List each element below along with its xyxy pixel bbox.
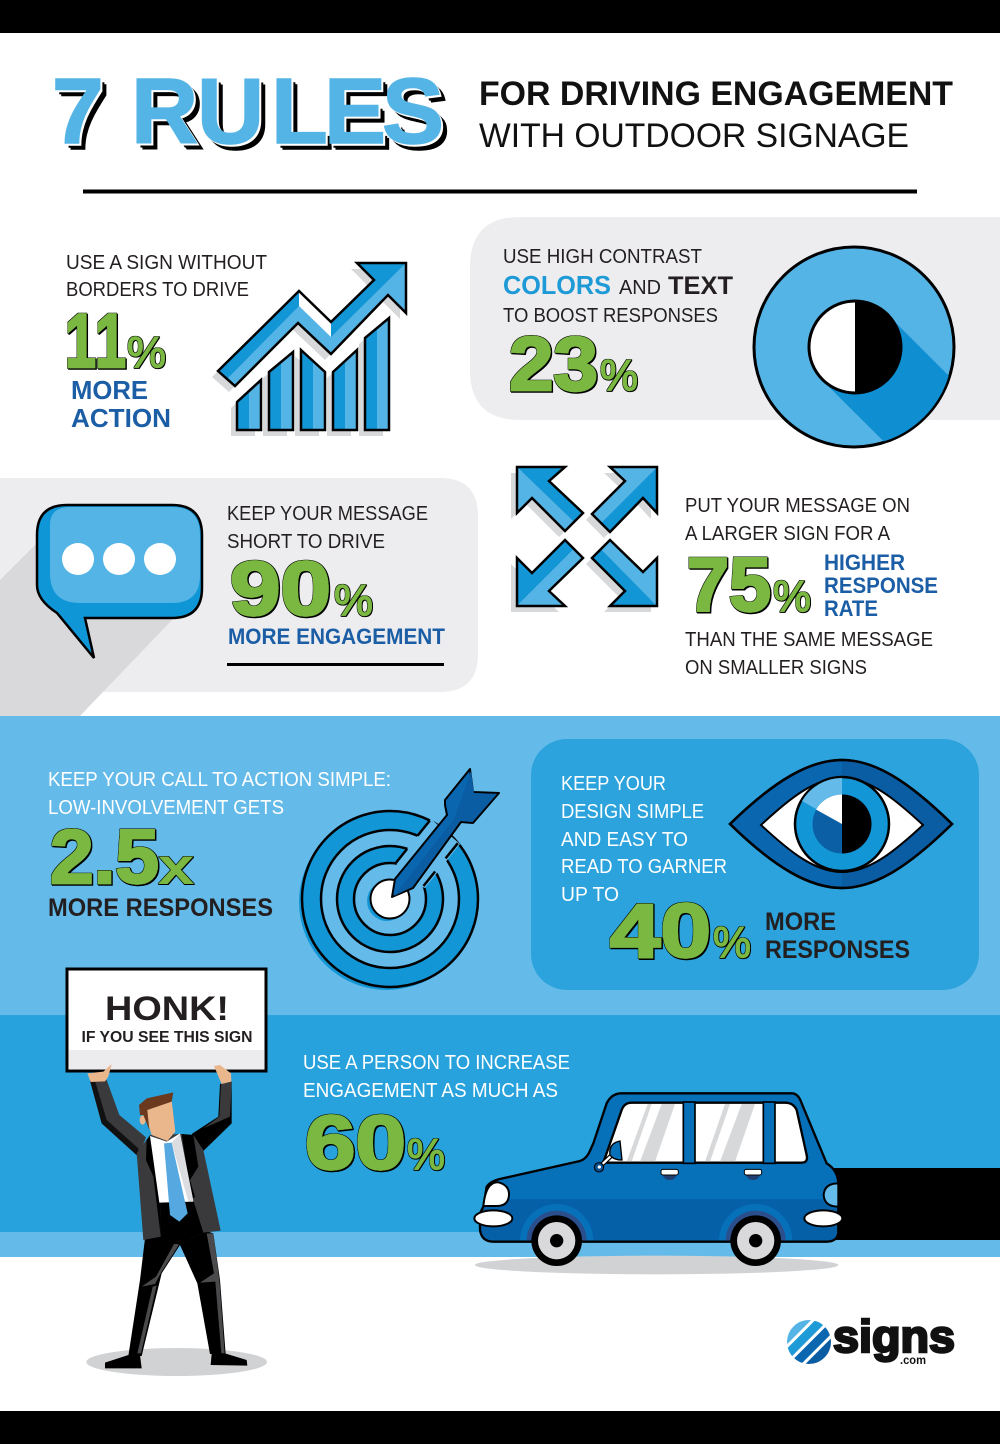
subtitle: WITH OUTDOOR SIGNAGE — [479, 117, 909, 155]
rule 6 text: AND EASY TO — [561, 829, 688, 851]
higher response rate: RESPONSE — [824, 573, 938, 598]
stat 2.5x: x — [160, 841, 192, 894]
icon: contrast circle — [752, 246, 956, 448]
black road block — [833, 1168, 1000, 1240]
stat 60% — [305, 1101, 445, 1186]
rule 1 text: USE A SIGN WITHOUT — [66, 252, 267, 274]
stat 23%: % — [600, 351, 638, 400]
stat 11%: 1 — [65, 299, 96, 384]
more responses: RESPONSES — [765, 936, 910, 964]
stat 75%: % — [773, 572, 811, 621]
subtitle: FOR DRIVING ENGAGEMENT — [479, 75, 953, 113]
rule 7: person text: ENGAGEMENT AS MUCH AS — [303, 1080, 558, 1102]
person holding sign — [86, 1064, 267, 1376]
stat 2.5x: 2.5 — [50, 815, 159, 900]
subtitle — [479, 75, 953, 155]
rule 2 text: TO BOOST RESPONSES — [503, 305, 718, 327]
bumpers — [474, 1210, 842, 1226]
title: 7 rules: 7 RULES — [0, 59, 444, 163]
mid blue band — [0, 1015, 1000, 1232]
rule 6 text: KEEP YOUR — [561, 773, 666, 795]
higher response rate: HIGHER — [824, 550, 905, 575]
rule 4: larger sign — [511, 467, 938, 679]
icon: eye — [730, 760, 952, 888]
icon: four expanding arrows — [511, 467, 657, 612]
stat 40%: % — [713, 918, 751, 967]
shoes — [105, 1353, 247, 1368]
rule 4 text — [685, 495, 933, 679]
more engagement: MORE ENGAGEMENT — [228, 624, 446, 649]
more action: ACTION — [71, 403, 171, 433]
higher response rate: RATE — [824, 596, 878, 621]
rule 3 text: SHORT TO DRIVE — [227, 531, 385, 553]
long shadow — [0, 543, 172, 716]
rule 6 text: DESIGN SIMPLE — [561, 801, 704, 823]
stat 40% — [610, 889, 751, 974]
rule 6 text: UP TO — [561, 884, 619, 906]
signs.com logo: .com — [900, 1353, 926, 1367]
sign text: HONK! — [105, 990, 229, 1028]
more responses — [765, 908, 910, 964]
icon: speech bubble — [37, 505, 202, 658]
bottom black bar — [0, 1411, 1000, 1444]
icon: target with dart — [299, 769, 499, 990]
rule 2 text: AND — [619, 277, 661, 299]
rule 4 text: THAN THE SAME MESSAGE — [685, 629, 933, 651]
more action: MORE — [71, 375, 148, 405]
honk sign — [67, 969, 266, 1071]
tail light — [824, 1183, 838, 1207]
headlight — [483, 1182, 509, 1206]
legs — [128, 1230, 226, 1356]
stat 23% — [509, 322, 638, 407]
jacket — [137, 1134, 221, 1245]
stat 75% — [687, 543, 811, 628]
rule 7: person text: USE A PERSON TO INCREASE — [303, 1052, 570, 1074]
side mirror — [594, 1141, 622, 1172]
top black bar — [0, 0, 1000, 33]
rule 2: high contrast panel — [470, 217, 1000, 448]
logo wordmark: signs — [833, 1311, 955, 1362]
hands — [87, 1064, 231, 1084]
ground shadow — [86, 1348, 267, 1376]
face — [143, 1101, 175, 1141]
stat 90%: 90 — [230, 547, 331, 632]
stat 40%: 40 — [610, 889, 711, 974]
rule 6 text — [561, 773, 727, 906]
rule 5: call to action — [48, 769, 499, 990]
signs.com logo — [787, 1318, 954, 1364]
rule 5 text: LOW-INVOLVEMENT GETS — [48, 797, 284, 819]
lower light blue band — [0, 1232, 1000, 1257]
wheels — [531, 1215, 781, 1266]
shirt — [150, 1133, 193, 1203]
light blue band — [0, 716, 1000, 1015]
rule 1: no borders — [65, 252, 406, 436]
higher response rate — [824, 550, 938, 621]
rule 4 text: PUT YOUR MESSAGE ON — [685, 495, 910, 517]
rule 6: simple design panel — [531, 739, 979, 990]
arms — [90, 1080, 232, 1157]
sign text: IF YOU SEE THIS SIGN — [82, 1029, 253, 1046]
hair — [139, 1092, 173, 1130]
icon: rising arrow and bar chart — [212, 263, 406, 436]
rule 2 text: TEXT — [668, 272, 733, 300]
stat 60%: 60 — [305, 1101, 406, 1186]
rule 2 text: COLORS — [503, 270, 611, 300]
stat 90%: % — [334, 576, 373, 625]
stat 11%: 1 — [95, 299, 126, 384]
door handles — [661, 1169, 762, 1180]
rule 3 text: KEEP YOUR MESSAGE — [227, 503, 428, 525]
tie — [164, 1143, 188, 1222]
panel background — [470, 217, 1000, 420]
rule 1 text: BORDERS TO DRIVE — [66, 279, 249, 301]
rule 4 text: ON SMALLER SIGNS — [685, 657, 867, 679]
rule 4 text: A LARGER SIGN FOR A — [685, 523, 891, 545]
stat 23%: 23 — [509, 322, 598, 407]
rule 5 text — [48, 769, 391, 819]
ground shadow — [475, 1256, 838, 1274]
more responses: MORE RESPONSES — [48, 894, 273, 922]
rule 7: person text — [303, 1052, 570, 1102]
stat 60%: % — [407, 1130, 445, 1179]
panel background — [531, 739, 979, 990]
rule 3: short message panel — [0, 478, 478, 716]
windows — [603, 1102, 807, 1163]
panel background — [0, 478, 478, 692]
rule 5 text: KEEP YOUR CALL TO ACTION SIMPLE: — [48, 769, 391, 791]
rule 3 text — [227, 503, 428, 553]
rule 2 text — [503, 246, 733, 327]
sign text — [82, 990, 253, 1046]
stat 11% — [65, 299, 166, 384]
rule 6 text: READ TO GARNER — [561, 856, 727, 878]
logo mark — [787, 1320, 831, 1364]
car — [465, 1093, 865, 1277]
rule 2 text: USE HIGH CONTRAST — [503, 246, 702, 268]
car body — [480, 1093, 838, 1242]
rule 1 text — [66, 252, 267, 301]
more action — [71, 375, 171, 433]
stat 75%: 75 — [687, 543, 771, 628]
stat 90% — [230, 547, 373, 632]
stat 11%: % — [127, 328, 166, 377]
more responses: MORE — [765, 908, 836, 936]
